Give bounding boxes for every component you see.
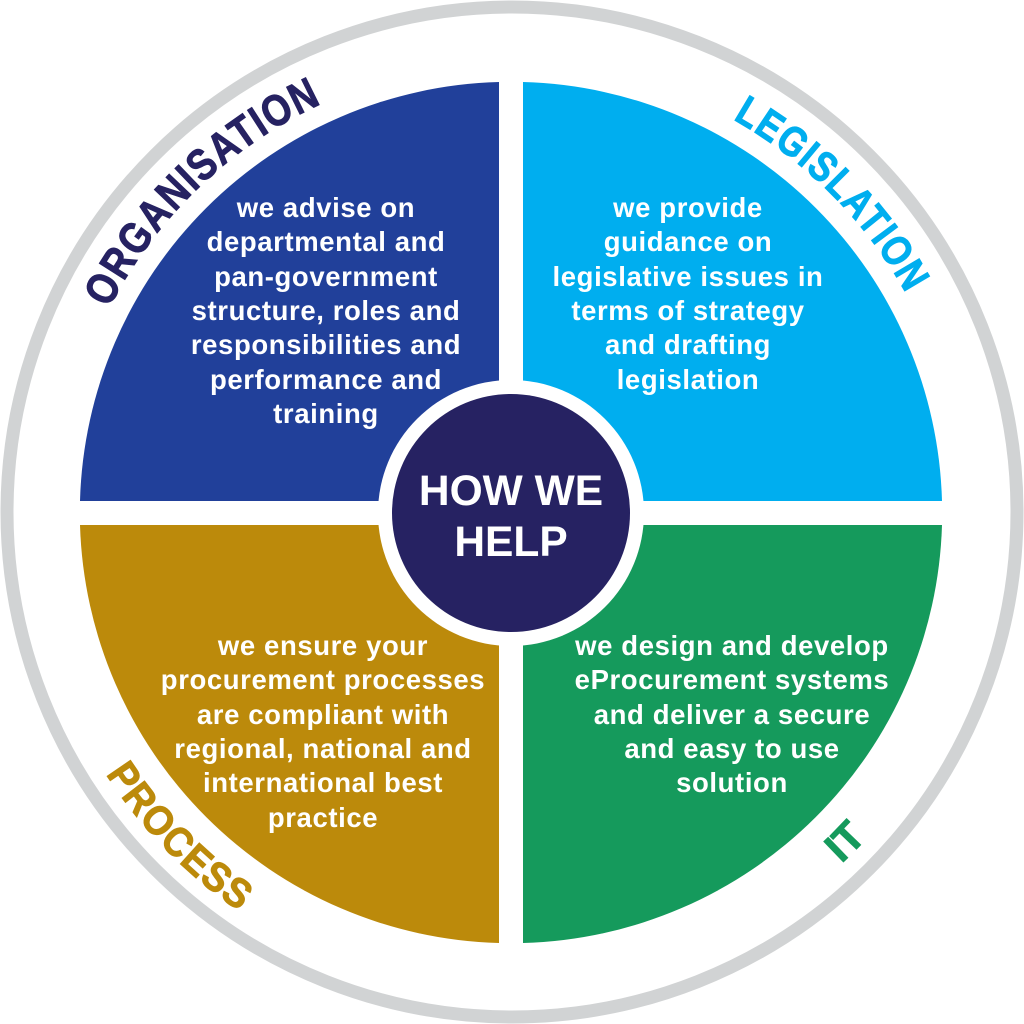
text: process description: practice bbox=[268, 802, 378, 833]
text: process description: we ensure your bbox=[217, 630, 428, 661]
text: process description: regional, national and bbox=[174, 733, 472, 764]
centre title bbox=[419, 468, 603, 566]
label: process: PROCESS bbox=[106, 760, 252, 908]
text: organisation description: we advise on bbox=[236, 192, 415, 223]
panel: legislation bbox=[523, 82, 942, 501]
text: it description: eProcurement systems bbox=[575, 664, 889, 695]
text: process description: procurement processes bbox=[161, 664, 485, 695]
text: it description: and easy to use bbox=[624, 733, 840, 764]
centre badge bbox=[378, 380, 644, 646]
text: legislation description: and drafting bbox=[605, 329, 771, 360]
text: it description: we design and develop bbox=[574, 630, 889, 661]
text: organisation description: pan-government bbox=[214, 261, 438, 292]
text: legislation description: legislation bbox=[617, 364, 759, 395]
text: it description: solution bbox=[676, 767, 788, 798]
label: legislation: LEGISLATION bbox=[734, 94, 930, 292]
centre title: HOW WE bbox=[419, 468, 603, 515]
text: organisation description: performance and bbox=[210, 364, 442, 395]
quadrant: organisation bbox=[80, 82, 499, 501]
text: legislation description: guidance on bbox=[604, 226, 772, 257]
text: process description: are compliant with bbox=[197, 699, 449, 730]
centre circle bbox=[392, 394, 630, 632]
text: it description bbox=[574, 630, 889, 798]
text: process description: international best bbox=[203, 767, 443, 798]
panel: process bbox=[80, 525, 499, 943]
text: legislation description: legislative issues in bbox=[553, 261, 823, 292]
panel: it bbox=[523, 525, 942, 943]
text: legislation description: we provide bbox=[612, 192, 763, 223]
text: it description: and deliver a secure bbox=[594, 699, 870, 730]
text: process description bbox=[161, 630, 485, 833]
label: organisation: ORGANISATION bbox=[86, 77, 320, 303]
text: organisation description: responsibilities and bbox=[191, 329, 461, 360]
label: it: IT bbox=[823, 818, 862, 862]
text: legislation description bbox=[553, 192, 823, 395]
text: organisation description: structure, roles and bbox=[192, 295, 460, 326]
centre white ring bbox=[378, 380, 644, 646]
quadrant: it bbox=[523, 525, 942, 943]
quadrant: process bbox=[80, 525, 499, 943]
text: legislation description: terms of strategy bbox=[571, 295, 805, 326]
centre title: HELP bbox=[454, 519, 568, 566]
text: organisation description: departmental and bbox=[207, 226, 445, 257]
quadrant: legislation bbox=[523, 82, 942, 501]
text: organisation description bbox=[191, 192, 461, 429]
panel: organisation bbox=[80, 77, 499, 501]
text: organisation description: training bbox=[273, 398, 379, 429]
